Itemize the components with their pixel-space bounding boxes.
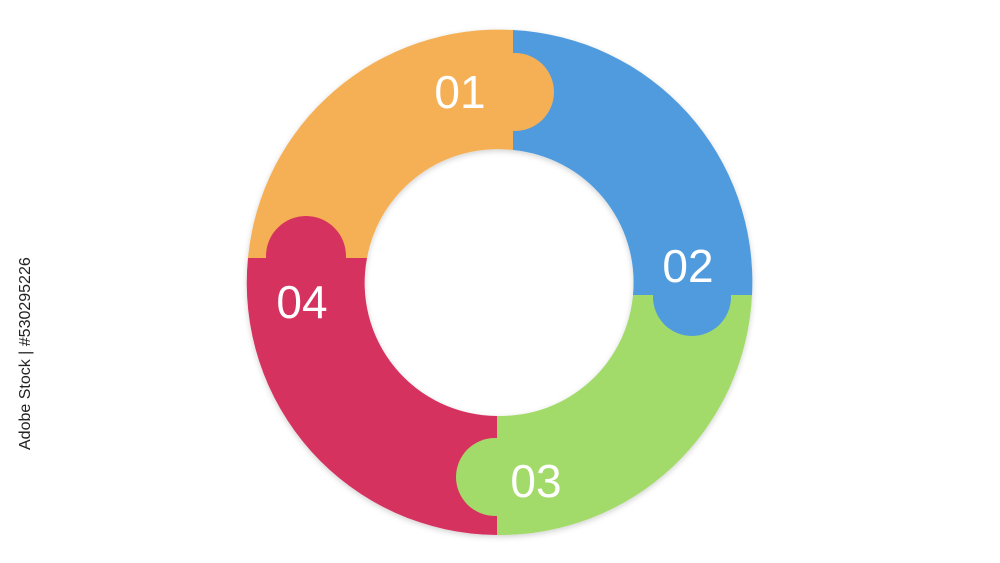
label 04: 04 bbox=[276, 276, 328, 328]
tab 01 bbox=[476, 53, 554, 131]
label 01: 01 bbox=[434, 66, 486, 118]
segment 01: orange bbox=[248, 30, 513, 258]
segment 03: green bbox=[497, 295, 752, 535]
watermark id: Adobe Stock | #530295226 bbox=[17, 257, 34, 450]
ring bbox=[247, 30, 752, 535]
segment 04: red bbox=[247, 258, 497, 535]
label 02: 02 bbox=[662, 240, 714, 292]
tab 02 bbox=[653, 258, 731, 336]
label 03: 03 bbox=[510, 455, 562, 507]
segment 02: blue bbox=[513, 30, 752, 295]
tab 04 bbox=[266, 216, 346, 296]
tab 03 bbox=[456, 438, 534, 516]
